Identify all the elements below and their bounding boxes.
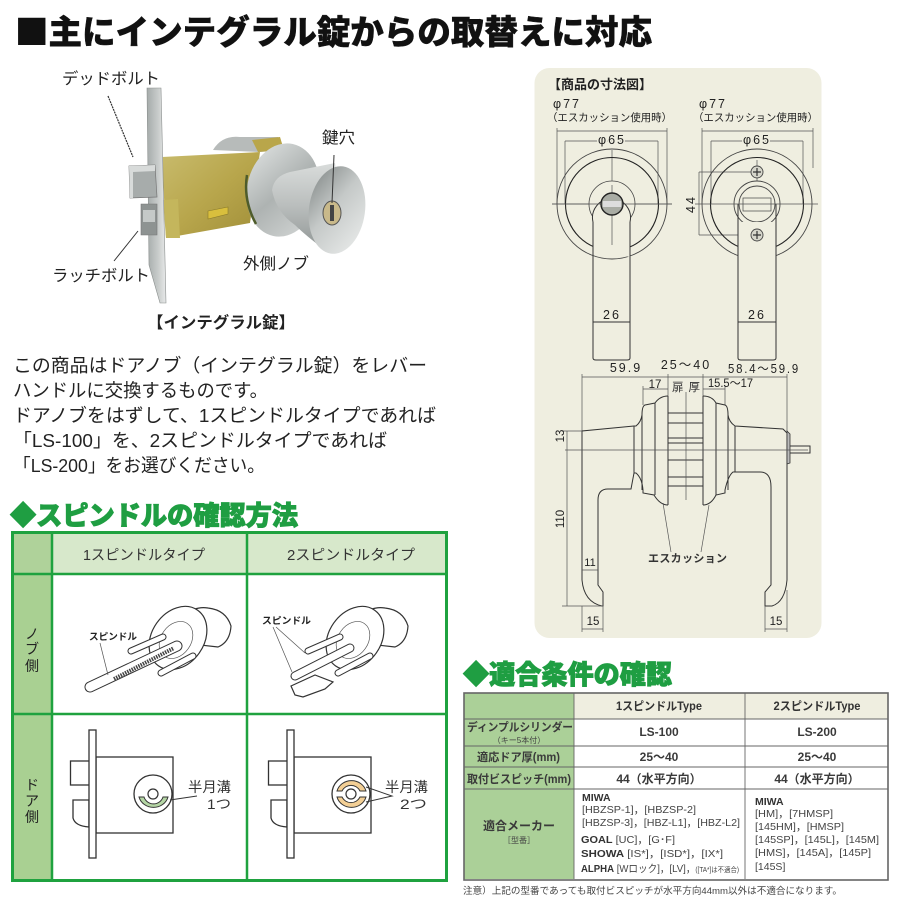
side view: 11	[584, 557, 596, 569]
row: makers: ［型番］	[503, 835, 535, 845]
front view: 2 spindle: 44	[684, 195, 698, 213]
row label: knob side: ブ	[25, 641, 39, 657]
table: compatibility	[464, 693, 888, 880]
row: cylinder: LS-200	[797, 725, 837, 739]
row: cylinder: ディンプルシリンダー	[467, 720, 573, 734]
lock case	[162, 152, 260, 238]
front view: 1 spindle: φ65	[598, 133, 626, 147]
row: door thickness	[477, 750, 837, 764]
front view: 2 spindle: φ77	[699, 97, 727, 111]
illustration: 1 spindle knob	[89, 595, 231, 687]
row: makers: GOAL [UC]，[G･F]	[581, 834, 675, 846]
label: latch bolt: ラッチボルト	[52, 267, 150, 285]
front view: 2 spindle: （エスカッション使用時）	[693, 111, 818, 124]
column header: 1 spindle: 1スピンドルタイプ	[83, 547, 205, 564]
row: makers: [HMS]，[145A]，[145P]	[755, 847, 871, 859]
row: cylinder	[467, 720, 837, 745]
row: makers: [145SP]，[145L]，[145M]	[755, 834, 879, 846]
label: outer knob: 外側ノブ	[243, 254, 309, 273]
text block: description: この商品はドアノブ（インテグラル錠）をレバー	[13, 355, 427, 376]
row: makers	[483, 792, 879, 875]
row: screw pitch: 取付ビスピッチ(mm)	[467, 772, 571, 786]
front view: 1 spindle: 26	[603, 308, 621, 322]
row: cylinder: LS-100	[639, 725, 679, 739]
front view: 2 spindle: 26	[748, 308, 766, 322]
label: dead bolt: デッドボルト	[62, 69, 160, 88]
dead bolt	[129, 165, 157, 198]
side view: 15.5～17	[708, 378, 753, 390]
heading: compatibility: ◆適合条件の確認	[463, 653, 672, 692]
row: makers: MIWA	[755, 796, 784, 808]
row: makers: [HBZSP-3]，[HBZ-L1]，[HBZ-L2]	[582, 817, 740, 829]
side view: 110	[555, 510, 567, 528]
row: door thickness: 25～40	[640, 750, 679, 764]
row: makers: SHOWA [IS*]，[ISD*]，[IX*]	[581, 848, 723, 860]
side view: エスカッション	[648, 552, 727, 565]
row: makers: [145S]	[755, 861, 785, 873]
row: makers: [HBZSP-1]，[HBZSP-2]	[582, 804, 696, 816]
row label: knob side: ノ	[25, 626, 39, 642]
row: door thickness: 適応ドア厚(mm)	[477, 750, 560, 764]
text block: description: ハンドルに交換するものです。	[13, 380, 268, 401]
side view: 15	[770, 616, 782, 628]
row: makers: [145HM]，[HMSP]	[755, 821, 844, 833]
latch bolt	[141, 204, 157, 235]
front view: 1 spindle: φ77	[553, 97, 581, 111]
row: makers: ALPHA [Wロック]，[LV]，([TA*]は不適合)	[581, 863, 739, 875]
front view: 2 spindle: φ65	[743, 133, 771, 147]
side view: 59.9	[610, 361, 642, 375]
row: screw pitch	[467, 771, 860, 786]
illustration: 2 spindle door side: 2つ	[400, 796, 427, 812]
face plate	[147, 88, 166, 303]
row: door thickness: 25～40	[798, 750, 837, 764]
latch slot	[208, 207, 228, 219]
row label: door side: ド	[25, 777, 39, 793]
illustration: 1 spindle door side: 半月溝	[188, 779, 231, 795]
front view: 1 spindle: （エスカッション使用時）	[547, 111, 672, 124]
title: ■主にインテグラル錠からの取替えに対応	[15, 5, 652, 54]
illustration: 2 spindle door side: 半月溝	[385, 779, 428, 795]
side view: 15	[587, 616, 599, 628]
knob flange	[238, 137, 328, 243]
illustration: 2 spindle door side	[268, 730, 428, 858]
row label: knob side	[25, 626, 39, 674]
side view: 13	[555, 430, 567, 442]
front view: 2 spindle	[684, 97, 818, 360]
text block: description: 「LS-200」をお選びください。	[13, 455, 265, 476]
panel: dimension drawing	[534, 68, 822, 638]
header row: 2スピンドルType	[774, 700, 860, 713]
caption: 【インテグラル錠】	[147, 313, 295, 332]
illustration: 1 spindle knob: スピンドル	[89, 632, 137, 643]
knob cap	[303, 163, 371, 257]
side view: 17	[649, 379, 661, 391]
key cylinder	[323, 201, 341, 225]
leader lines	[108, 96, 133, 157]
row label: knob side: 側	[25, 658, 39, 674]
illustration: 1 spindle door side	[70, 730, 231, 858]
row: screw pitch: 44（水平方向）	[774, 771, 860, 786]
row: makers: MIWA	[582, 792, 611, 804]
side view: 25～40	[661, 358, 711, 372]
header row	[616, 700, 860, 713]
text block: description	[13, 355, 436, 476]
footnote: 注意）上記の型番であっても取付ビスピッチが水平方向44mm以外は不適合になります。	[463, 885, 842, 897]
side view: 扉厚	[672, 381, 700, 394]
side view	[555, 358, 810, 632]
column header: 2 spindle: 2スピンドルタイプ	[287, 547, 416, 564]
illustration: 2 spindle knob: スピンドル	[262, 616, 311, 627]
heading: spindle check: ◆スピンドルの確認方法	[10, 494, 298, 533]
panel: spindle table	[12, 532, 447, 881]
row: screw pitch: 44（水平方向）	[616, 771, 702, 786]
panel heading: 【商品の寸法図】	[548, 77, 652, 92]
row label: door side	[25, 777, 39, 825]
row label: door side: ア	[25, 793, 39, 809]
row: makers: [HM]，[7HMSP]	[755, 808, 833, 820]
knob neck	[272, 163, 345, 250]
rear knob	[213, 137, 285, 152]
side view: 58.4～59.9	[728, 362, 800, 376]
photo: integral lock	[52, 69, 371, 332]
front view: 1 spindle	[547, 97, 672, 361]
text block: description: 「LS-100」を、2スピンドルタイプであれば	[13, 430, 387, 451]
header row: 1スピンドルType	[616, 700, 702, 713]
row label: door side: 側	[25, 809, 39, 825]
row: makers: 適合メーカー	[483, 818, 555, 833]
label: keyhole: 鍵穴	[322, 129, 355, 147]
illustration: 1 spindle door side: 1つ	[207, 796, 231, 812]
illustration: 2 spindle knob	[262, 595, 408, 697]
row: cylinder: （キー5本付）	[493, 735, 545, 745]
text block: description: ドアノブをはずして、1スピンドルタイプであれば	[13, 405, 436, 426]
